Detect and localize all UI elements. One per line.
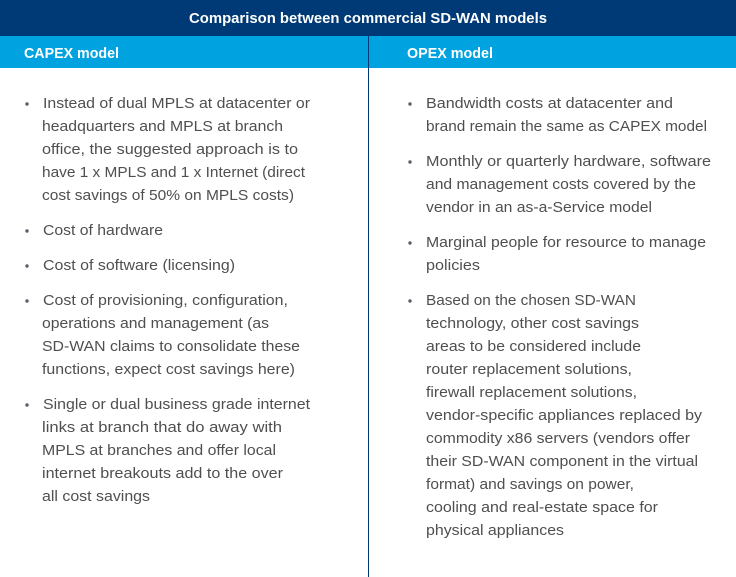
title bar: Comparison between commercial SD-WAN models [189, 11, 547, 27]
column header: OPEX model [369, 36, 736, 68]
bullet: other cost savings: firewall replacement solutions, [426, 384, 637, 401]
bullet: business grade internet links: Single or dual business grade internet [43, 396, 311, 413]
bullet: marginal people [408, 234, 706, 274]
bullet: bandwidth costs [408, 95, 707, 135]
bullet: business grade internet links: links at branch that do away with [42, 419, 282, 436]
bullet: other cost savings: format) and savings on power, [426, 476, 634, 493]
bullet: other cost savings: their SD-WAN component in the virtual [426, 453, 698, 470]
bullet: dual MPLS replacement: cost savings of 50% on MPLS costs) [42, 187, 294, 204]
bullet: dual MPLS replacement [25, 95, 310, 204]
bullet: cost of hardware: Cost of hardware [43, 222, 163, 239]
bullet: cost of provisioning: operations and management (as [42, 315, 269, 332]
bullet: cost of software: Cost of software (licensing) [43, 257, 235, 274]
title bar [0, 0, 736, 36]
bullet: business grade internet links: MPLS at branches and offer local [42, 442, 276, 459]
panel: CAPEX list [25, 95, 311, 505]
bullet: as-a-Service costs: vendor in an as-a-Service model [426, 199, 652, 216]
bullet: other cost savings: commodity x86 servers (vendors offer [426, 430, 690, 447]
bullet: cost of provisioning: functions, expect cost savings here) [42, 361, 295, 378]
panel: OPEX list [408, 95, 711, 539]
column header: CAPEX model [0, 36, 368, 68]
bullet: as-a-Service costs [408, 153, 711, 216]
column header: CAPEX model: CAPEX model [24, 45, 119, 62]
bullet: cost of provisioning [25, 292, 300, 378]
bullet: bandwidth costs: brand remain the same as CAPEX model [426, 118, 707, 135]
bullet: other cost savings [408, 292, 703, 539]
bullet: other cost savings: vendor-specific appliances replaced by [426, 407, 703, 424]
bullet: dual MPLS replacement: Instead of dual MPLS at datacenter or [43, 95, 310, 112]
bullet: other cost savings: areas to be considered include [426, 338, 641, 355]
bullet: business grade internet links: all cost savings [42, 488, 150, 505]
bullet: marginal people: Marginal people for resource to manage [426, 234, 706, 251]
bullet: bandwidth costs: Bandwidth costs at datacenter and [426, 95, 673, 112]
bullet: business grade internet links [25, 396, 311, 505]
bullet: business grade internet links: internet breakouts add to the over [42, 465, 283, 482]
bullet: dual MPLS replacement: office, the suggested approach is to [42, 141, 298, 158]
bullet: other cost savings: Based on the chosen SD-WAN [426, 292, 636, 309]
bullet: as-a-Service costs: and management costs covered by the [426, 176, 696, 193]
bullet: other cost savings: technology, other cost savings [426, 315, 639, 332]
bullet: cost of provisioning: Cost of provisioning, configuration, [43, 292, 288, 309]
bullet: other cost savings: router replacement solutions, [426, 361, 632, 378]
bullet: cost of provisioning: SD-WAN claims to consolidate these [42, 338, 300, 355]
bullet: other cost savings: cooling and real-estate space for [426, 499, 658, 516]
bullet: dual MPLS replacement: have 1 x MPLS and 1 x Internet (direct [42, 164, 306, 181]
bullet: dual MPLS replacement: headquarters and MPLS at branch [42, 118, 283, 135]
bullet: marginal people: policies [426, 257, 480, 274]
column header: OPEX model: OPEX model [407, 45, 493, 62]
bullet: as-a-Service costs: Monthly or quarterly hardware, software [426, 153, 711, 170]
bullet: other cost savings: physical appliances [426, 522, 564, 539]
column divider [368, 36, 369, 577]
